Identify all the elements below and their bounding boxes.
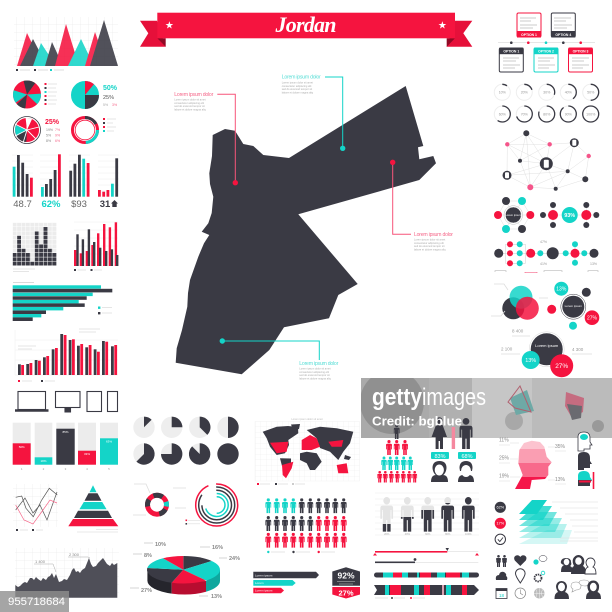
pie chart 2: 50% — [103, 85, 118, 92]
silhouette progress chart: 80% — [445, 532, 451, 536]
layered stack chart — [519, 500, 598, 544]
progress rings 10 to 100 percent: 30% — [543, 91, 551, 95]
callout: north-west red — [174, 92, 238, 185]
large bubble stats: 27% — [555, 363, 568, 370]
waffle chart — [13, 223, 57, 272]
progress rings 10 to 100 percent: 90% — [565, 112, 573, 116]
avatar group — [554, 555, 601, 599]
bubble cluster: 13% — [556, 287, 567, 293]
grouped column chart — [15, 329, 118, 382]
pie chart 3 with legend: 7% — [55, 128, 60, 132]
option boxes timeline: OPTION 2 — [538, 50, 554, 54]
gender comparison: 68% — [461, 454, 473, 460]
watermark band background image — [361, 378, 612, 438]
pie chart 2: 3% — [112, 103, 117, 107]
stock number tag: 955718684 — [8, 596, 65, 608]
large bubble stats: 4 300 — [572, 347, 584, 352]
area chart: 2 300 — [69, 552, 80, 557]
progress rings 10 to 100 percent: 20% — [521, 91, 529, 95]
area chart: 1 400 — [35, 559, 46, 564]
arrow bars with hexagon stats: 92% — [337, 570, 355, 580]
percentage badges: 62% — [496, 506, 505, 510]
title banner: ★ — [438, 20, 447, 32]
option boxes timeline: OPTION 1 — [503, 50, 519, 54]
callout: south teal: Lorem ipsum dolor sit amet — [299, 367, 331, 371]
pie chart 3 with legend: 19% — [46, 128, 53, 132]
bar charts with values: 48.7 — [13, 199, 32, 210]
head segment chart: 13% — [555, 477, 566, 483]
world map: Lorem ipsum dolor sit amet — [291, 417, 323, 421]
pie chart 3 with legend: 6% — [55, 139, 60, 143]
stacked percentage columns: 33% — [84, 452, 90, 456]
world map — [255, 417, 360, 485]
circle cluster diagrams: 93% — [564, 213, 575, 219]
gettyimages watermark: Credit: bgblue — [372, 414, 462, 428]
progress rings 10 to 100 percent — [494, 84, 599, 122]
option boxes timeline: OPTION 1 — [521, 33, 537, 37]
stacked percentage columns: 50% — [19, 445, 25, 449]
device icons — [15, 392, 118, 412]
callout: north-west red: Lorem ipsum dolor — [174, 92, 214, 98]
arrow bars with hexagon stats — [253, 567, 360, 598]
callout: east red: labore et dolore magna aliq — [414, 247, 446, 251]
bar charts with values — [12, 154, 119, 210]
network diagram — [502, 130, 591, 191]
slider bars — [373, 548, 479, 563]
callout: north-east teal: labore et dolore magna aliq — [282, 90, 314, 94]
pyramid chart — [68, 485, 118, 532]
arrow bars with hexagon stats: Lorem ipsum — [255, 589, 273, 593]
flow diagram — [494, 240, 598, 273]
concentric ring chart — [186, 484, 238, 526]
head segment chart — [499, 438, 566, 489]
option boxes timeline: OPTION 4 — [555, 33, 571, 37]
3D pie chart — [130, 542, 240, 600]
stacked percentage columns: 5 — [108, 467, 110, 471]
icon set: 18 — [499, 593, 504, 598]
large bubble stats: 13% — [525, 358, 536, 364]
pie chart 3 with legend: 9% — [55, 134, 60, 138]
arrow bars with hexagon stats: Lorem ipsum — [255, 573, 273, 577]
large bubble stats: 2 100 — [501, 346, 513, 352]
gettyimages watermark — [372, 384, 486, 428]
gettyimages watermark: images — [422, 384, 486, 411]
callout: east red — [390, 160, 453, 251]
stacked percentage columns: 85% — [62, 430, 69, 434]
callout: south teal: consectetur adipiscing elit — [299, 370, 329, 374]
people grid chart — [265, 498, 347, 553]
callout: north-east teal: consectetur adipiscing elit — [282, 84, 312, 88]
3D pie chart: 13% — [211, 594, 222, 600]
silhouette progress chart: 20% — [384, 532, 390, 536]
bubble cluster: Lorem ipsum — [565, 304, 582, 308]
3D pie chart: 16% — [212, 545, 223, 551]
large bubble stats: Lorem ipsum — [535, 343, 559, 348]
pie chart 1 — [20, 83, 57, 105]
callout: south teal: labore et dolore magna aliq — [299, 376, 331, 380]
title banner: ★ — [165, 20, 174, 32]
bubble cluster — [547, 282, 599, 330]
callout: east red: Lorem ipsum dolor sit amet — [414, 238, 446, 242]
option boxes timeline: OPTION 3 — [573, 50, 589, 54]
venn diagram — [491, 284, 548, 320]
silhouette progress chart: 100% — [465, 532, 472, 536]
stacked percentage columns: 4 — [86, 467, 88, 471]
3D pie chart: 10% — [155, 542, 166, 548]
3D pie chart: 27% — [141, 588, 152, 594]
head segment chart: 19% — [499, 474, 510, 480]
3D pie chart: 8% — [144, 553, 152, 559]
pie chart 3 with legend: 8% — [46, 139, 51, 143]
percentage badges: 17% — [496, 522, 505, 526]
bar charts with values: $93 — [71, 199, 87, 210]
icon set — [496, 555, 547, 599]
arrow bars with hexagon stats: Lorem — [255, 581, 264, 585]
triangle chart — [14, 17, 118, 71]
pie chart 3 with legend — [14, 116, 60, 144]
progress rings 10 to 100 percent: 60% — [499, 112, 507, 116]
title banner — [140, 12, 472, 47]
head segment chart: 35% — [555, 444, 566, 450]
callout: east red: sed do eiusmod tempor sit — [414, 244, 445, 248]
paired bar chart — [74, 222, 118, 271]
callout: east red: consectetur adipiscing elit — [414, 241, 444, 245]
callout: north-west red: sed do eiusmod tempor sit — [174, 104, 205, 108]
flow diagram: 47% — [540, 240, 547, 244]
progress rings 10 to 100 percent: 100% — [586, 112, 596, 116]
gender comparison: 83% — [434, 454, 446, 460]
progress rings 10 to 100 percent: 50% — [587, 91, 595, 95]
pie chart 3 with legend: 5% — [46, 134, 51, 138]
silhouette progress chart: 60% — [425, 532, 431, 536]
stock number tag — [0, 591, 69, 612]
3D pie chart: 24% — [229, 556, 240, 562]
stacked percentage columns: 1 — [21, 467, 23, 471]
callout: east red: Lorem ipsum dolor — [414, 232, 453, 238]
horizontal bar chart — [13, 282, 112, 321]
progress rings 10 to 100 percent: 40% — [565, 91, 573, 95]
progress rings 10 to 100 percent: 70% — [521, 112, 529, 116]
stacked percentage columns: 3 — [65, 467, 67, 471]
callout: south teal — [220, 338, 339, 380]
silhouette progress chart — [375, 493, 479, 536]
head icons — [578, 432, 594, 489]
small donut chart — [133, 484, 186, 515]
percentage badges — [495, 502, 506, 544]
callout: north-east teal — [282, 74, 345, 151]
pie chart 3 with legend: 25% — [45, 119, 60, 126]
people pyramid — [377, 424, 417, 482]
line chart — [13, 484, 58, 531]
silhouette progress chart: 40% — [405, 532, 411, 536]
progress rings 10 to 100 percent: 80% — [543, 112, 551, 116]
title banner: Jordan — [274, 12, 336, 37]
callout: north-west red: Lorem ipsum dolor sit amet — [174, 98, 206, 102]
callout: south teal: Lorem ipsum dolor — [299, 361, 339, 367]
area chart — [15, 548, 119, 598]
map of Jordan — [176, 86, 436, 374]
bar charts with values: 31 — [100, 199, 111, 210]
flow diagram: 13% — [590, 262, 597, 266]
pie chart 2 — [78, 85, 118, 107]
flow diagram: 41% — [540, 262, 547, 266]
stacked percentage columns: 18% — [40, 459, 47, 463]
large bubble stats: 8 400 — [512, 328, 524, 334]
bubble cluster: 27% — [587, 316, 598, 322]
pie chart 2: 25% — [103, 95, 114, 101]
gender comparison — [431, 417, 476, 482]
option boxes timeline — [498, 13, 595, 72]
callout: north-east teal: sed do eiusmod tempor sit — [282, 87, 312, 91]
segmented progress bars — [374, 572, 479, 599]
head segment chart: 11% — [499, 438, 509, 444]
large bubble stats — [501, 328, 592, 377]
stacked percentage columns — [13, 423, 118, 471]
bar charts with values: 62% — [41, 199, 61, 210]
callout: south teal: sed do eiusmod tempor sit — [299, 373, 330, 377]
stacked percentage columns: 63% — [106, 440, 112, 444]
circle cluster diagrams: Lorem ipsum — [505, 213, 522, 217]
head segment chart: 25% — [499, 456, 510, 462]
callout: north-west red: consectetur adipiscing elit — [174, 101, 204, 105]
pie chart 2: 5% — [103, 103, 108, 107]
callout: north-east teal: Lorem ipsum dolor — [282, 74, 321, 80]
stacked percentage columns: 2 — [43, 467, 45, 471]
gettyimages watermark: getty — [372, 384, 423, 411]
fraction pies — [133, 417, 239, 465]
donut chart — [72, 118, 116, 142]
arrow bars with hexagon stats: 27% — [338, 588, 354, 598]
callout: north-east teal: Lorem ipsum dolor sit amet — [282, 80, 313, 84]
progress rings 10 to 100 percent: 10% — [499, 91, 507, 95]
callout: north-west red: labore et dolore magna aliq — [174, 107, 206, 111]
circle cluster diagrams — [494, 197, 599, 233]
